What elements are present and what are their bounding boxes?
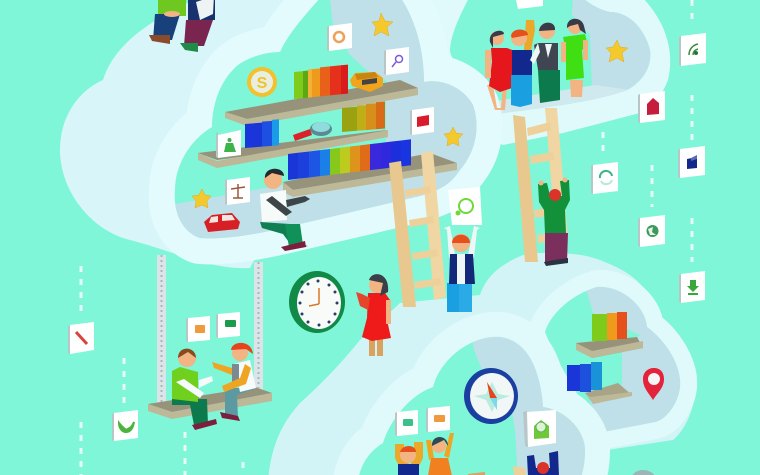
bookshelf: lower shelf [283,153,457,197]
card: magnifier [384,47,409,75]
stars [192,13,628,208]
figure: couple at top [149,0,215,52]
bookshelf: top shelf [225,80,418,126]
cloud: main upper with bookshelves [60,0,500,268]
figure: man climbing ladder [538,178,570,266]
bookshelf: bottom cloud upper [576,312,643,358]
books: lower row [288,139,411,180]
card: blue folder [678,146,705,178]
card: green chat [216,312,240,338]
figure: sitting man on shelf [260,169,310,251]
card: bottom orange chat [426,406,450,432]
cloud: lower main body [268,253,700,475]
books: middle left [245,119,279,148]
icon: magnifier on shelf [293,122,332,141]
card: raised by man [448,187,482,225]
ladder: right [513,108,568,262]
card: red envelope [638,91,665,123]
card: download [679,271,705,303]
icon: coin: S [257,75,268,92]
card: big green mail [523,410,556,447]
figure: boy on swing [172,349,217,430]
icon: compass [464,368,518,424]
bookshelf: middle shelf [198,130,388,168]
clock [289,271,345,333]
card: red pencil [68,322,94,354]
figure: girl on swing [212,343,257,421]
figure: man with raised arms [444,226,480,312]
swing [148,255,272,419]
card: green circle [591,162,618,194]
card: green leaves [112,410,138,441]
figure: man with raised arms, bottom [395,442,423,475]
books: top row [294,65,348,99]
ladder: left [389,151,446,307]
card: bottom green chat [395,410,418,436]
gray element at lower edge [632,470,655,475]
figure: woman with raised arms, bottom [426,433,454,475]
card: orange ring [327,23,352,51]
figure: woman in red dress [356,274,391,356]
books: middle right [342,102,385,132]
card: globe [638,215,665,247]
card: money bag [216,130,241,158]
figure: man from behind, bottom [468,451,559,475]
card: orange chat [186,316,210,342]
card: top edge [516,0,543,9]
figure: group of four on top cloud [485,19,588,110]
card: red mail [410,107,434,135]
icon: coin [247,67,277,97]
card: scales [225,177,250,205]
cloud: top right [425,0,670,145]
card: wifi [679,33,706,66]
bookshelf: bottom cloud lower [567,362,632,404]
icon: yellow toy car [350,72,383,92]
icon: red toy car [204,213,240,232]
icon: location pin [643,368,664,400]
